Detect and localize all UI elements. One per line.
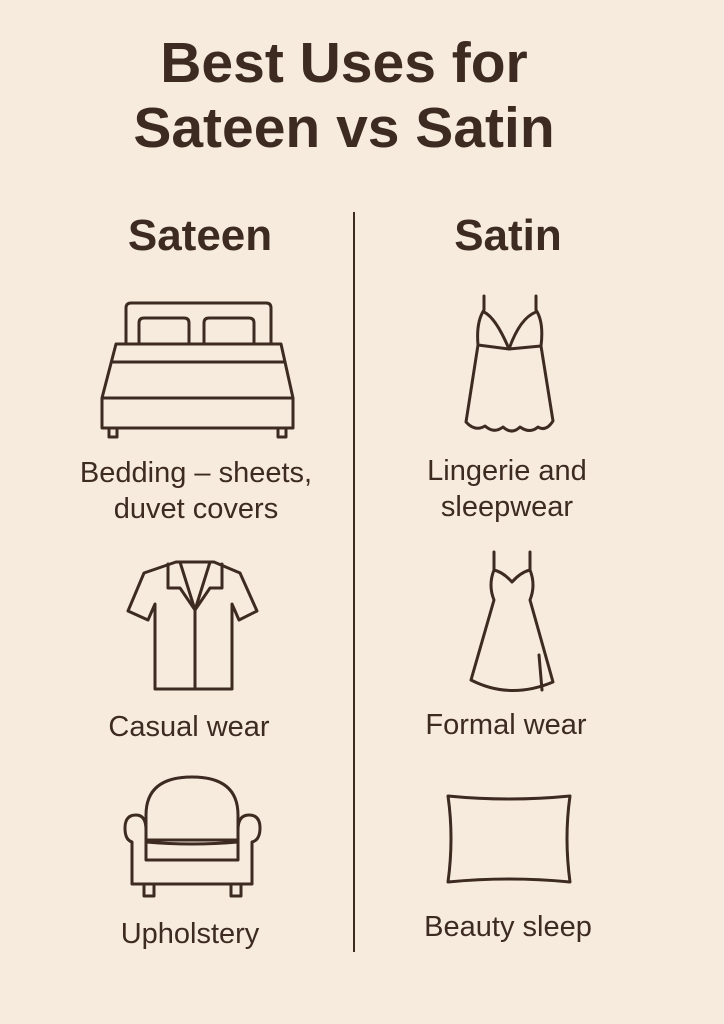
divider bbox=[353, 212, 355, 952]
label: formal wear: Formal wear bbox=[425, 709, 587, 741]
label: bedding: Bedding – sheets, bbox=[80, 457, 312, 489]
label: lingerie: sleepwear bbox=[441, 491, 573, 523]
icon: lingerie bbox=[466, 296, 553, 431]
label: lingerie: Lingerie and bbox=[427, 455, 587, 487]
icon: pillow bbox=[448, 796, 570, 882]
icon: dress bbox=[471, 552, 553, 691]
title: Sateen vs Satin bbox=[133, 96, 555, 160]
label: bedding bbox=[80, 457, 312, 525]
label: casual wear: Casual wear bbox=[108, 711, 270, 743]
title: Best Uses for bbox=[160, 31, 528, 95]
icon: shirt bbox=[128, 562, 257, 689]
heading: satin: Satin bbox=[454, 211, 562, 260]
icon: bed bbox=[102, 303, 293, 437]
label: beauty sleep: Beauty sleep bbox=[424, 911, 592, 943]
icon: armchair bbox=[125, 777, 260, 896]
title bbox=[133, 31, 555, 160]
heading: sateen: Sateen bbox=[128, 211, 272, 260]
label: lingerie bbox=[427, 455, 587, 523]
label: bedding: duvet covers bbox=[114, 493, 278, 525]
label: upholstery: Upholstery bbox=[121, 918, 259, 950]
